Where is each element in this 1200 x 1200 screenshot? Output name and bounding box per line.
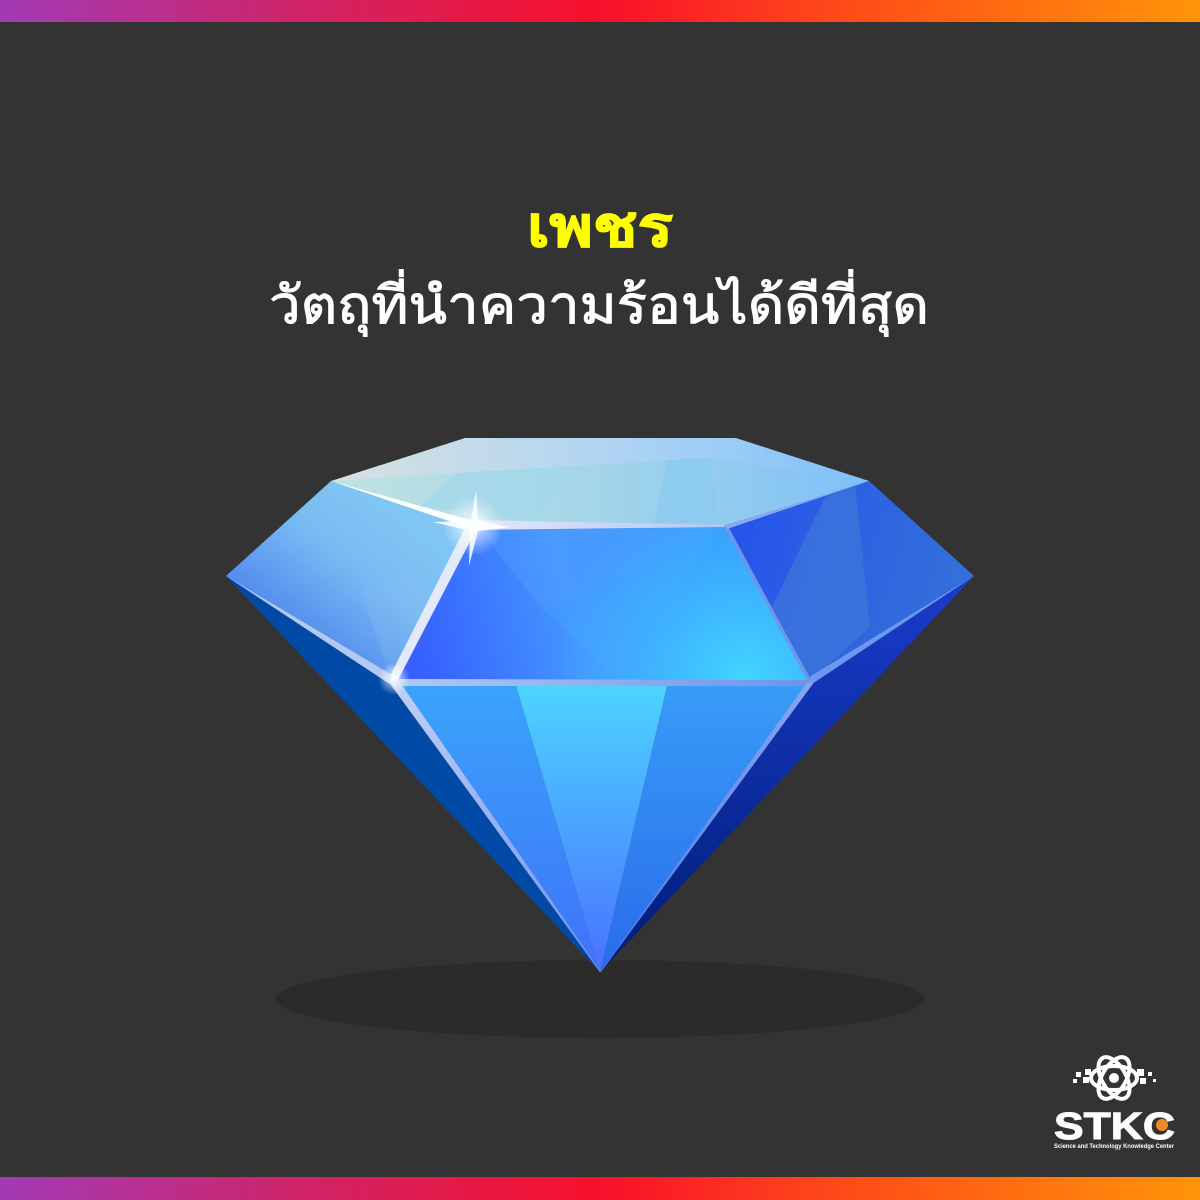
diamond illustration [226,438,974,972]
bottom gradient bar [0,1177,1200,1200]
centre facet reflections [396,526,811,680]
ground shadow [276,960,924,1038]
right crown facet [724,481,974,680]
right crown reflection [772,485,870,680]
sparkle upper [433,490,510,566]
logo orange dot [1156,1119,1168,1131]
facet edge highlights [226,481,974,972]
sparkle lower [378,663,410,695]
top gradient bar [0,0,1200,22]
table inner reflections [331,458,869,526]
STKC logo [1054,1052,1175,1150]
left crown facet [226,481,470,680]
left crown reflection [360,560,444,680]
logo icon: atom [1091,1052,1137,1104]
title: เพชร [527,195,673,258]
lower right facet [600,682,811,972]
logo tagline: Science and Technology Knowledge Center [1054,1144,1175,1150]
logo wordmark: STKC [1054,1106,1175,1148]
subtitle: วัตถุที่นำความร้อนได้ดีที่สุด [269,269,929,337]
lower dark left facet [226,576,600,972]
lower dark right facet [600,576,974,972]
logo icon: pixels [1073,1069,1156,1084]
lower centre facet [515,682,668,972]
table top facet [331,438,869,526]
centre facet [396,526,811,680]
lower left facet [392,682,600,972]
